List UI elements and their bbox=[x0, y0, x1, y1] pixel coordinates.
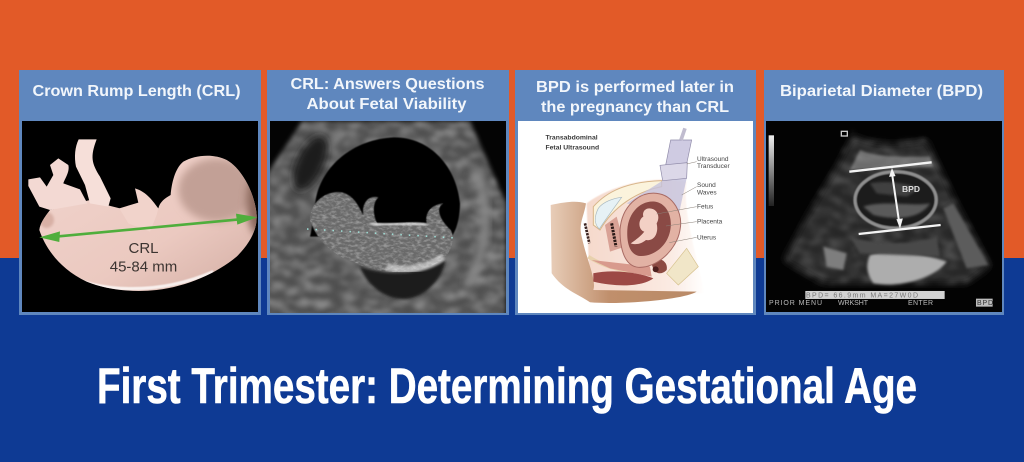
diagram labels: Fetus bbox=[697, 204, 714, 210]
diagram title bbox=[546, 134, 599, 152]
heading: biparietal diameter: Biparietal Diameter (BPD) bbox=[780, 83, 983, 100]
image: transabdominal ultrasound illustration bbox=[518, 121, 753, 313]
background: blue lower band bbox=[0, 258, 1024, 462]
diagram title: Transabdominal bbox=[546, 134, 598, 142]
diagram labels: Transducer bbox=[697, 163, 730, 170]
diagram title: Fetal Ultrasound bbox=[546, 144, 599, 152]
pelvic structures bbox=[605, 217, 625, 252]
panel: crown rump length bbox=[19, 70, 270, 315]
scanner readout: ENTER bbox=[908, 300, 933, 307]
panel: fetal viability ultrasound bbox=[267, 70, 509, 315]
measurement dots bbox=[307, 229, 456, 238]
fetus bbox=[631, 208, 658, 244]
transducer bbox=[666, 140, 692, 165]
diagram labels: Sound bbox=[697, 182, 716, 189]
heading: BPD timing: BPD is performed later in bbox=[536, 79, 734, 96]
diagram labels bbox=[697, 156, 730, 242]
heading: fetal viability bbox=[290, 76, 485, 113]
panel: transabdominal diagram bbox=[515, 70, 756, 315]
diagram labels: Uterus bbox=[697, 234, 717, 242]
leader lines bbox=[657, 162, 697, 243]
label: CRL range: CRL bbox=[128, 240, 159, 257]
scanner readout: PRIOR MENU bbox=[769, 300, 822, 307]
spine bbox=[667, 248, 698, 285]
heading: fetal viability: CRL: Answers Questions bbox=[290, 76, 485, 93]
diagram labels: Waves bbox=[697, 190, 717, 196]
background: orange upper band bbox=[0, 0, 1024, 258]
uterus bbox=[620, 193, 681, 267]
scanner readout bbox=[770, 292, 992, 305]
BPD label: BPD bbox=[902, 184, 920, 194]
BPD measurement lines bbox=[849, 162, 941, 234]
heading: BPD timing: the pregnancy than CRL bbox=[541, 99, 729, 116]
beam bbox=[627, 178, 687, 217]
scanner readout: BPD bbox=[977, 300, 993, 307]
image: CRL ultrasound scan bbox=[270, 121, 506, 313]
image: BPD ultrasound scan bbox=[766, 121, 1002, 312]
heading: crown rump length: Crown Rump Length (CRL) bbox=[32, 83, 240, 100]
diagram labels: Ultrasound bbox=[697, 156, 729, 163]
body cross-section bbox=[587, 179, 705, 300]
scanner readout: BPD= 66.9mm MA=27W0D bbox=[806, 292, 918, 300]
heading: fetal viability: About Fetal Viability bbox=[306, 96, 467, 113]
label: CRL range bbox=[110, 240, 177, 276]
heading: BPD timing bbox=[536, 79, 734, 116]
arrow: CRL measurement bbox=[39, 214, 257, 242]
label: CRL range: 45-84 mm bbox=[110, 258, 177, 276]
image: fetus on black bbox=[22, 121, 270, 312]
scanner readout: WRKSHT bbox=[838, 300, 869, 307]
diagram labels: Placenta bbox=[697, 218, 723, 226]
panel: biparietal diameter bbox=[764, 70, 1004, 315]
